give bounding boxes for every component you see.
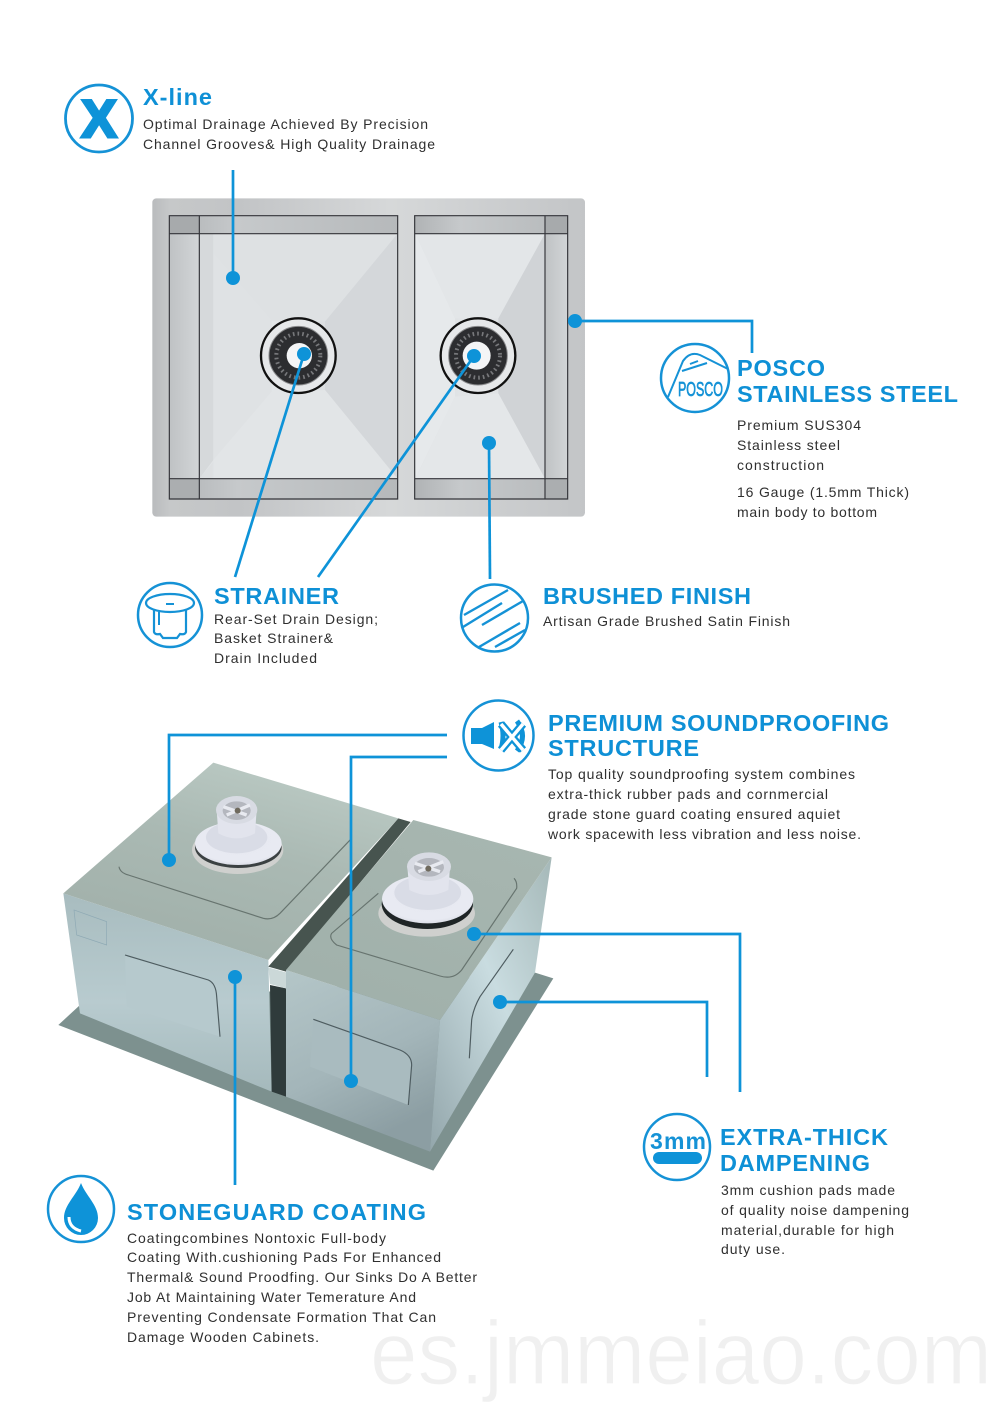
text block: soundproofing: grade stone guard coating ensured aquiet: [548, 806, 840, 822]
text block: POSCO stainless steel: main body to bottom: [737, 504, 877, 520]
text block: X-line: Optimal Drainage Achieved By Precision: [143, 116, 428, 132]
sink rim: [152, 198, 585, 517]
text block: X-line: X-line: [143, 84, 212, 110]
icon: brushed finish: [461, 584, 528, 652]
photo: top view stainless steel double sink: [152, 198, 585, 517]
left drain: [261, 318, 336, 393]
icon: soundproofing: [464, 700, 534, 770]
text block: extra-thick dampening: EXTRA-THICK: [720, 1124, 888, 1150]
icon: strainer: [138, 583, 202, 647]
text block: POSCO stainless steel: 16 Gauge (1.5mm Thick): [737, 484, 909, 500]
text block: X-line: Channel Grooves& High Quality Drainage: [143, 136, 435, 152]
text block: soundproofing: [547, 710, 889, 842]
flange: [58, 973, 553, 1171]
icon: POSCO: [661, 344, 729, 412]
text block: POSCO stainless steel: POSCO: [737, 355, 825, 381]
left drain cap: [192, 796, 283, 874]
text block: stoneguard coating: Thermal& Sound Proodfing. Our Sinks Do A Better: [127, 1269, 477, 1285]
right drain cap: [378, 852, 475, 937]
right basin: [286, 820, 552, 1152]
text block: stoneguard coating: Damage Wooden Cabinets.: [127, 1329, 319, 1345]
photo: underside of sink with soundproof coating: [58, 763, 553, 1171]
text block: strainer: Drain Included: [214, 650, 317, 666]
text block: extra-thick dampening: 3mm cushion pads made: [721, 1182, 895, 1198]
text block: brushed finish: [543, 583, 790, 629]
text block: stoneguard coating: Job At Maintaining Water Temerature And: [127, 1289, 416, 1305]
text block: extra-thick dampening: of quality noise dampening: [721, 1202, 909, 1218]
text block: stoneguard coating: STONEGUARD COATING: [127, 1199, 426, 1225]
text block: POSCO stainless steel: STAINLESS STEEL: [737, 381, 958, 407]
gap between basins: [268, 818, 411, 1097]
text block: strainer: [214, 583, 378, 666]
right drain: [441, 318, 515, 393]
text block: extra-thick dampening: material,durable for high: [721, 1222, 894, 1238]
text block: extra-thick dampening: [720, 1124, 909, 1257]
icon: X-line: X: [81, 90, 117, 149]
text block: POSCO stainless steel: [737, 355, 958, 520]
text block: soundproofing: Top quality soundproofing system combines: [548, 766, 855, 782]
text block: soundproofing: STRUCTURE: [548, 735, 699, 761]
left bowl: [169, 216, 398, 499]
text block: strainer: STRAINER: [214, 583, 339, 609]
right bowl: [415, 216, 568, 499]
icon: X-line: [66, 85, 132, 152]
text block: POSCO stainless steel: Premium SUS304: [737, 417, 861, 433]
callout lines and dots: [162, 170, 752, 1185]
text block: soundproofing: extra-thick rubber pads and cornmercial: [548, 786, 828, 802]
icon: 3mm dampening: [644, 1114, 710, 1180]
text block: X-line: [143, 84, 435, 152]
text block: extra-thick dampening: duty use.: [721, 1241, 785, 1257]
text block: extra-thick dampening: DAMPENING: [720, 1150, 870, 1176]
text block: stoneguard coating: Coatingcombines Nontoxic Full-body: [127, 1230, 386, 1246]
text block: strainer: Rear-Set Drain Design;: [214, 611, 378, 627]
left basin: [63, 763, 398, 1092]
text block: POSCO stainless steel: Stainless steel: [737, 437, 840, 453]
text block: stoneguard coating: Coating With.cushioning Pads For Enhanced: [127, 1249, 441, 1265]
text block: POSCO stainless steel: construction: [737, 457, 824, 473]
text block: brushed finish: Artisan Grade Brushed Satin Finish: [543, 613, 790, 629]
icon: POSCO: POSCO: [678, 379, 723, 401]
text block: soundproofing: PREMIUM SOUNDPROOFING: [548, 710, 889, 736]
icon: water drop: [48, 1176, 114, 1242]
icon: 3mm dampening: 3mm: [650, 1128, 706, 1154]
text block: soundproofing: work spacewith less vibration and less noise.: [547, 826, 861, 842]
text block: stoneguard coating: Preventing Condensate Formation That Can: [127, 1309, 436, 1325]
text block: stoneguard coating: [127, 1199, 477, 1345]
text block: strainer: Basket Strainer&: [214, 630, 334, 646]
text block: brushed finish: BRUSHED FINISH: [543, 583, 751, 609]
